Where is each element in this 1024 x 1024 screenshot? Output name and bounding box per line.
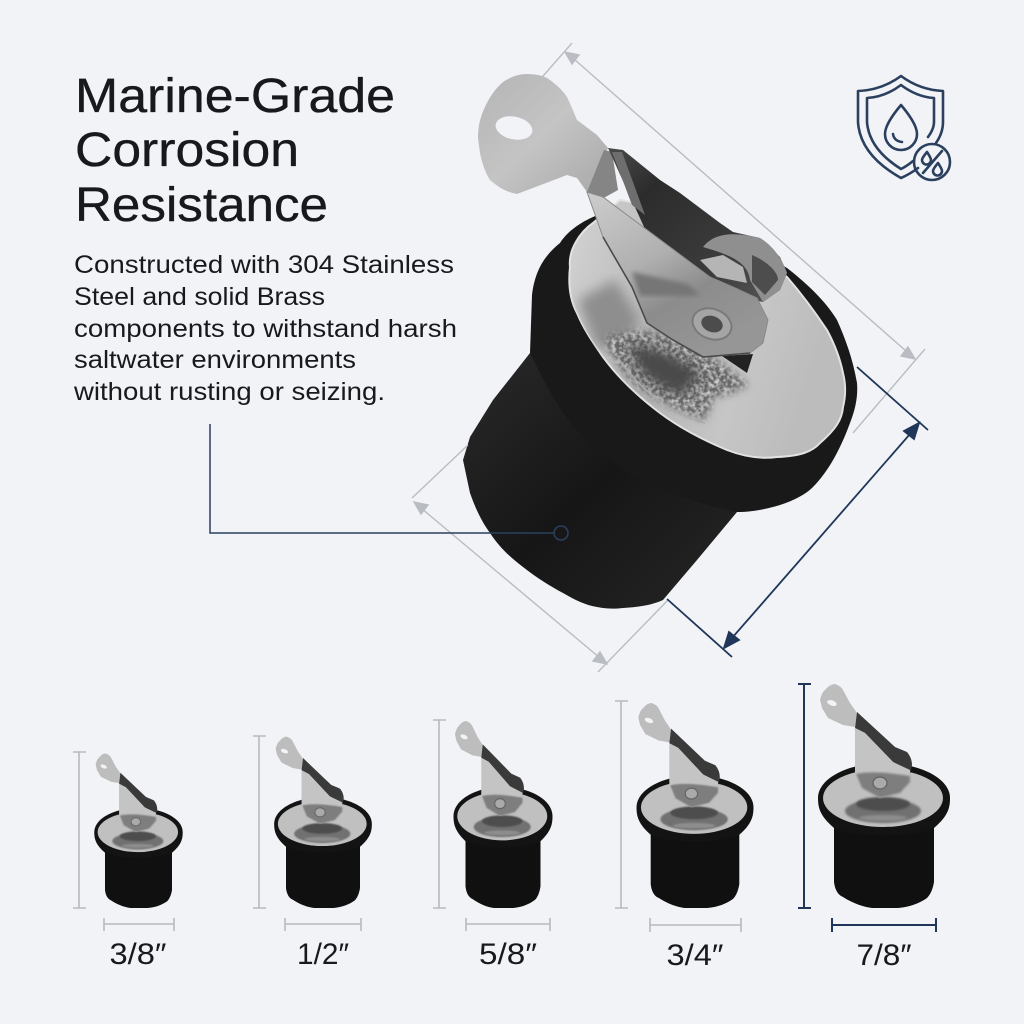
description text [73,251,457,406]
dimension: base width [412,445,668,672]
plug 3/8 [94,753,183,908]
description text: without rusting or seizing. [73,378,385,406]
pull tab [478,74,608,194]
size 5/8 [433,720,552,971]
small dark tip [722,354,753,373]
dimension: overall length [508,43,925,433]
bracket curl [703,234,787,302]
label 7/8: 7/8″ [856,939,912,972]
size 1/2 [253,736,372,971]
plug 7/8 [818,684,950,908]
size 7/8 [798,684,950,972]
steel disc [569,200,845,458]
icon: shield with water drop [858,76,950,180]
label 1/2: 1/2″ [297,938,349,971]
label 3/4: 3/4″ [666,939,724,972]
description text: Steel and solid Brass [74,283,325,311]
dimension lines 7/8 [798,684,936,932]
plug 5/8 [454,721,552,908]
curl inner shadow [752,255,778,295]
rivet [688,303,736,345]
plug 3/4 [637,703,753,908]
label 5/8: 5/8″ [479,938,537,971]
face lower edge and crease [603,237,750,357]
size 3/8 [73,752,183,971]
infographic canvas [73,42,952,966]
nut [700,255,747,283]
dimension lines 5/8 [433,720,550,931]
size 3/4 [615,701,753,972]
bracket streaks [632,272,700,296]
label 3/8: 3/8″ [110,938,167,971]
description text: Constructed with 304 Stainless [74,251,454,279]
rubber rim [530,205,857,512]
dimension lines 3/8 [73,752,174,931]
main product: drain plug [463,74,857,609]
title [75,70,395,232]
description text: saltwater environments [74,346,356,374]
lower body [463,353,740,609]
title: Marine-Grade [75,70,395,123]
description text: components to withstand harsh [74,315,457,343]
bracket crease [612,152,645,215]
title: Corrosion [75,124,299,177]
dimension: navy rim width [667,367,928,657]
title: Resistance [75,179,328,232]
tab fold shading [587,150,618,200]
plug 1/2 [274,737,372,908]
bracket back [608,148,787,302]
bracket face [587,192,768,357]
disc reflections and mottled centre [578,280,748,423]
dimension lines 1/2 [253,736,361,931]
callout leader line [210,424,568,540]
dimension lines 3/4 [615,701,741,932]
